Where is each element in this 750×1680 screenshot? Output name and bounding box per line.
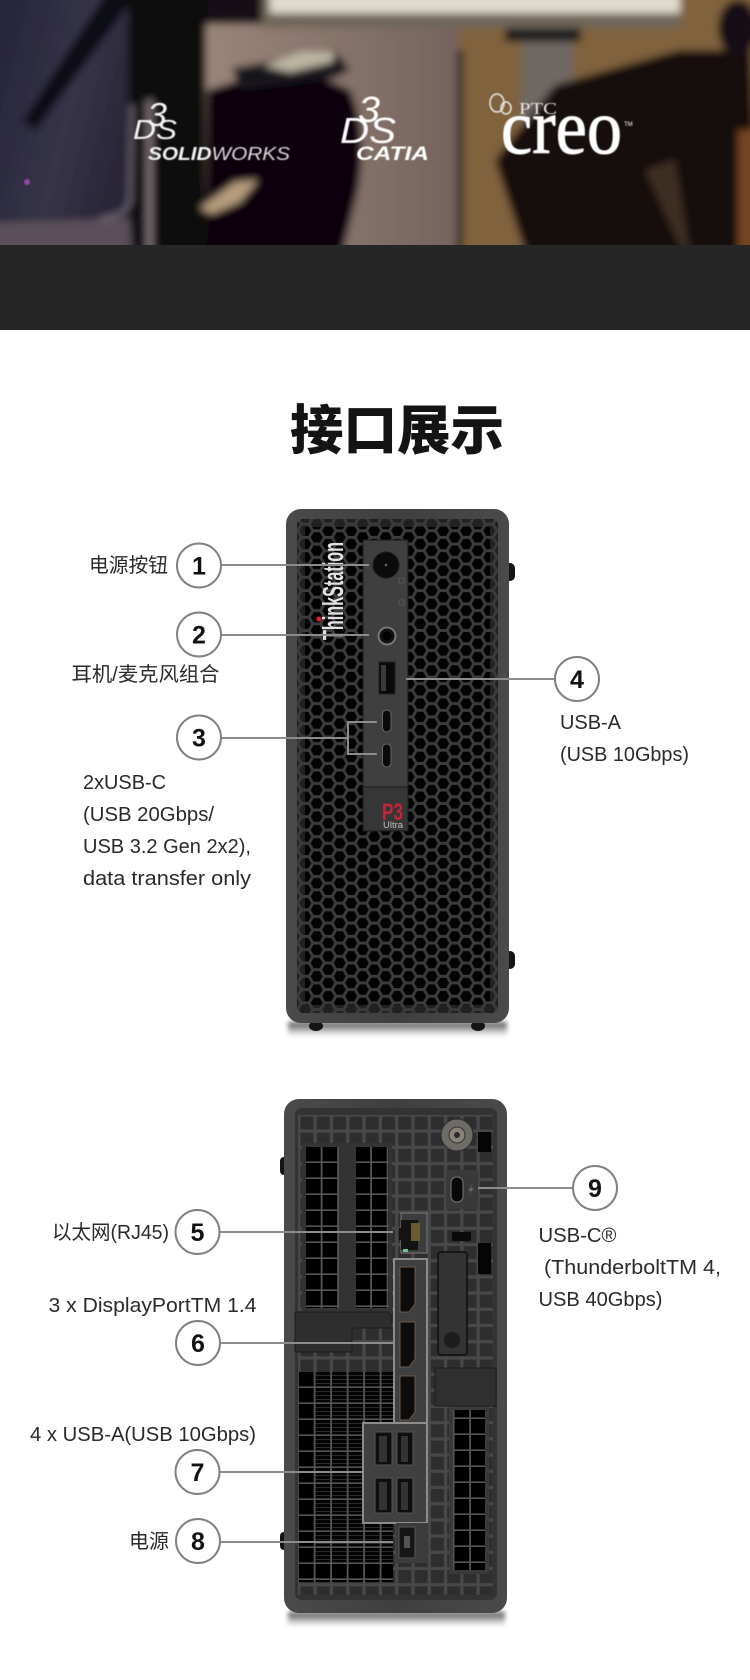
callout 5: Ethernet: 5: [191, 1219, 205, 1247]
logo: CATIA: [340, 89, 429, 165]
logo: CATIA: DS: [340, 110, 396, 151]
callout 9: Thunderbolt: 9: [588, 1175, 602, 1203]
expansion cover: [438, 1252, 467, 1355]
callout 9: Thunderbolt: USB 40Gbps): [538, 1289, 662, 1311]
callout 6: DisplayPort: 3 x DisplayPortTM 1.4: [48, 1295, 256, 1317]
front shadow: [288, 1022, 507, 1036]
photo background: [0, 0, 750, 255]
lock slot: [452, 1232, 471, 1241]
callout 8: power: 8: [191, 1528, 205, 1556]
front control panel: Ultra: [383, 820, 403, 830]
callout 5: Ethernet: 以太网(RJ45): [52, 1221, 169, 1244]
callout 1: power button: 电源按钮: [89, 554, 168, 577]
callout 7: rear USB-A: [30, 1424, 362, 1494]
callout 3: USB-C: USB 3.2 Gen 2x2),: [83, 836, 251, 858]
callout 6: DisplayPort: [48, 1295, 393, 1365]
left PCIe frame: [302, 1143, 392, 1313]
callout 9: Thunderbolt: (ThunderboltTM 4,: [544, 1257, 721, 1279]
right column slots: [478, 1132, 491, 1274]
left bracket tab: [295, 1312, 391, 1352]
callout 8: power: [129, 1519, 393, 1563]
callout 4: USB-A: [406, 657, 689, 766]
logo: SolidWorks: DS: [133, 114, 177, 145]
ThinkStation logo: ThinkStation: [318, 542, 350, 640]
rear chassis: [284, 1099, 507, 1613]
PCIe vents: [306, 1147, 339, 1308]
callout 3: USB-C: 3: [192, 724, 206, 752]
callout 4: USB-A: USB-A: [560, 712, 622, 734]
side feet: [309, 563, 515, 1031]
callout 3: USB-C: [83, 716, 377, 890]
lower right vents: [449, 1406, 489, 1574]
logo: PTC Creo: TM: [624, 122, 633, 128]
P3 Ultra badge: P3: [382, 799, 403, 826]
USB-C ports: [382, 710, 391, 732]
panel: rear view of workstation: [280, 1099, 507, 1626]
logo: CATIA: CATIA: [356, 143, 429, 165]
rear side feet: [280, 1157, 290, 1550]
power connector: [396, 1523, 428, 1563]
callout 3: USB-C: 2xUSB-C: [83, 772, 166, 794]
callout 8: power: 电源: [129, 1530, 169, 1553]
callout 2: headset jack: 2: [192, 622, 206, 650]
logo: SolidWorks: 3: [147, 96, 168, 133]
lower left vents: [299, 1372, 393, 1582]
callout 9: Thunderbolt: USB-C®: [538, 1225, 617, 1247]
logo: PTC Creo: creo: [501, 83, 622, 170]
callout 6: DisplayPort: 6: [191, 1330, 205, 1358]
dark band under banner: [0, 245, 750, 330]
panel: banner photo with software logos: [0, 0, 750, 255]
DisplayPort group: [394, 1259, 427, 1423]
logo: SolidWorks: SOLID WORKS: [148, 143, 291, 164]
callout 5: Ethernet: [52, 1210, 393, 1254]
antenna connector: [441, 1119, 473, 1151]
callout 3: USB-C: data transfer only: [83, 868, 251, 890]
callout 1: power button: [89, 544, 369, 588]
front honeycomb grille: [297, 519, 498, 1013]
callout 2: headset jack: 耳机/麦克风组合: [72, 663, 219, 686]
callout 4: USB-A: (USB 10Gbps): [560, 744, 689, 766]
rear shadow: [288, 1612, 505, 1626]
front control panel: [363, 540, 408, 831]
panel: front view of workstation: [286, 509, 515, 1036]
logo: SolidWorks: [133, 96, 291, 164]
rear grid panel: [295, 1108, 497, 1600]
USB-A group: [363, 1423, 427, 1523]
title: 接口展示: [290, 388, 504, 465]
ethernet port: [399, 1213, 427, 1253]
front chassis: [286, 509, 509, 1023]
logo: PTC Creo: PTC: [519, 99, 557, 118]
callout 7: rear USB-A: 4 x USB-A(USB 10Gbps): [30, 1424, 256, 1446]
USB-A port: [379, 662, 395, 694]
callout 2: headset jack: [72, 612, 369, 686]
callout 4: USB-A: 4: [570, 666, 584, 694]
callout 3: USB-C: (USB 20Gbps/: [83, 804, 214, 826]
power button: [373, 552, 399, 578]
ThinkStation logo: [316, 542, 350, 640]
callout 1: power button: 1: [192, 552, 206, 580]
right bracket tab: [435, 1368, 496, 1406]
thunderbolt port: [446, 1170, 478, 1209]
audio jack: [378, 628, 396, 644]
logo: CATIA: 3: [358, 89, 380, 130]
callout 7: rear USB-A: 7: [191, 1459, 204, 1487]
callout 9: Thunderbolt: [478, 1166, 721, 1311]
